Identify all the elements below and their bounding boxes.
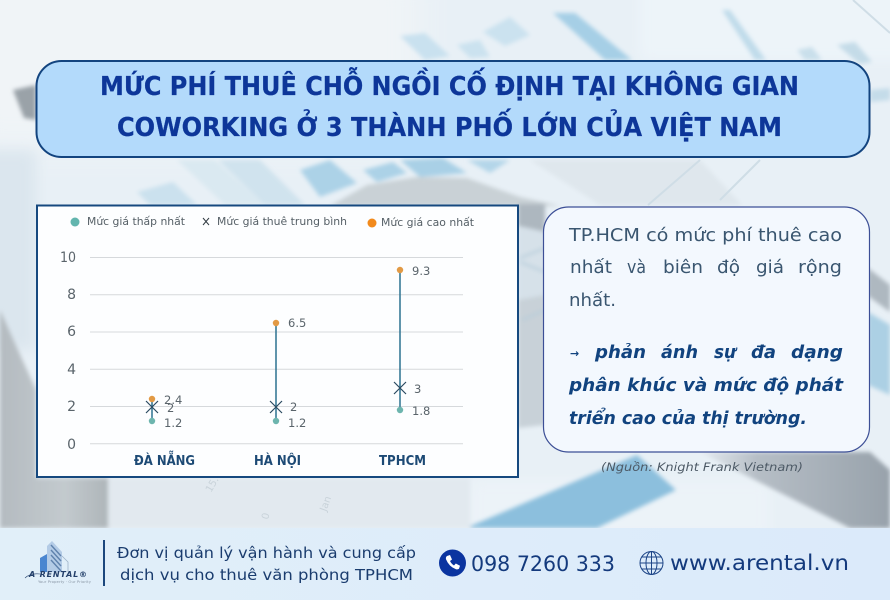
footer tagline (117, 544, 416, 584)
chart legend: Mức giá cao nhất (381, 217, 474, 229)
y axis labels: 6 (67, 324, 76, 340)
takeaway emphasis text: dạng (791, 343, 843, 363)
takeaway emphasis text: đa (751, 343, 776, 363)
series: Đà Nẵng (146, 393, 182, 430)
takeaway emphasis text: phản (594, 343, 646, 363)
title text: MỨC PHÍ THUÊ CHỖ NGỒI CỐ ĐỊNH TẠI KHÔNG GIAN (100, 66, 799, 102)
title panel (36, 61, 870, 157)
chart legend: Mức giá thấp nhất (87, 216, 185, 228)
takeaway body text: độ (717, 258, 740, 278)
footer tagline: Đơn vị quản lý vận hành và cung cấp (117, 544, 416, 562)
category labels (134, 452, 426, 469)
takeaway emphasis text: triển cao của thị trường. (569, 407, 807, 429)
title text: COWORKING Ở 3 THÀNH PHỐ LỚN CỦA VIỆT NAM (117, 107, 782, 143)
icon: A Rental logo: A RENTAL® (28, 570, 87, 579)
panel: takeaway (544, 207, 870, 452)
series: Đà Nẵng: 2 (167, 401, 174, 415)
icon: A Rental logo (25, 541, 92, 584)
series: Hà Nội: 6.5 (288, 316, 306, 330)
takeaway emphasis text: ánh (661, 343, 698, 363)
icon: A Rental logo: Your Property · Our Priority (38, 579, 92, 584)
y axis labels (60, 250, 76, 453)
series: Hà Nội (270, 316, 306, 430)
category labels: ĐÀ NẴNG (134, 452, 195, 469)
series: TPHCM: 9.3 (412, 264, 430, 278)
footer tagline: dịch vụ cho thuê văn phòng TPHCM (120, 566, 413, 584)
y axis labels: 2 (67, 399, 76, 415)
takeaway emphasis text (568, 343, 844, 429)
chart grid lines (90, 258, 463, 444)
y axis labels: 0 (67, 437, 76, 453)
icon: globe (640, 552, 663, 574)
takeaway emphasis text: → (570, 347, 579, 360)
blurred report photo background: 15.00 (204, 464, 228, 494)
phone number: 098 7260 333 (471, 552, 615, 576)
blurred report photo background: 0 (260, 512, 273, 521)
footer band (0, 528, 890, 600)
series: TPHCM: 3 (414, 382, 421, 396)
series: TPHCM (394, 264, 430, 418)
takeaway body text: biên (663, 258, 703, 278)
takeaway body text: nhất (570, 257, 612, 278)
footer divider (103, 540, 105, 586)
series: Đà Nẵng: 1.2 (164, 416, 182, 430)
y axis labels: 4 (67, 362, 76, 378)
series: Hà Nội: 1.2 (288, 416, 306, 430)
takeaway body text: giá (756, 258, 784, 278)
series: Hà Nội: 2 (290, 400, 297, 414)
chart legend (70, 216, 474, 229)
series: Đà Nẵng: 2.4 (164, 393, 182, 407)
blurred report photo background: Jan (318, 495, 334, 514)
takeaway body text: rộng (798, 258, 842, 278)
takeaway emphasis text: sự (714, 343, 737, 363)
panel: range chart (37, 206, 518, 477)
category labels: TPHCM (379, 454, 426, 469)
takeaway body text: nhất. (569, 290, 616, 311)
y axis labels: 8 (67, 287, 76, 303)
series: TPHCM: 1.8 (412, 404, 430, 418)
y axis labels: 10 (60, 250, 76, 266)
chart legend: Mức giá thuê trung bình (217, 216, 347, 228)
takeaway body text: TP.HCM có mức phí thuê cao (568, 226, 842, 246)
category labels: HÀ NỘI (254, 453, 301, 469)
icon: phone (439, 550, 466, 576)
takeaway body text: và (627, 258, 646, 278)
takeaway emphasis text: phân khúc và mức độ phát (568, 376, 844, 396)
source note: (Nguồn: Knight Frank Vietnam) (601, 460, 803, 474)
takeaway body text (568, 226, 842, 311)
title text (100, 66, 799, 143)
website: www.arental.vn (670, 551, 849, 575)
